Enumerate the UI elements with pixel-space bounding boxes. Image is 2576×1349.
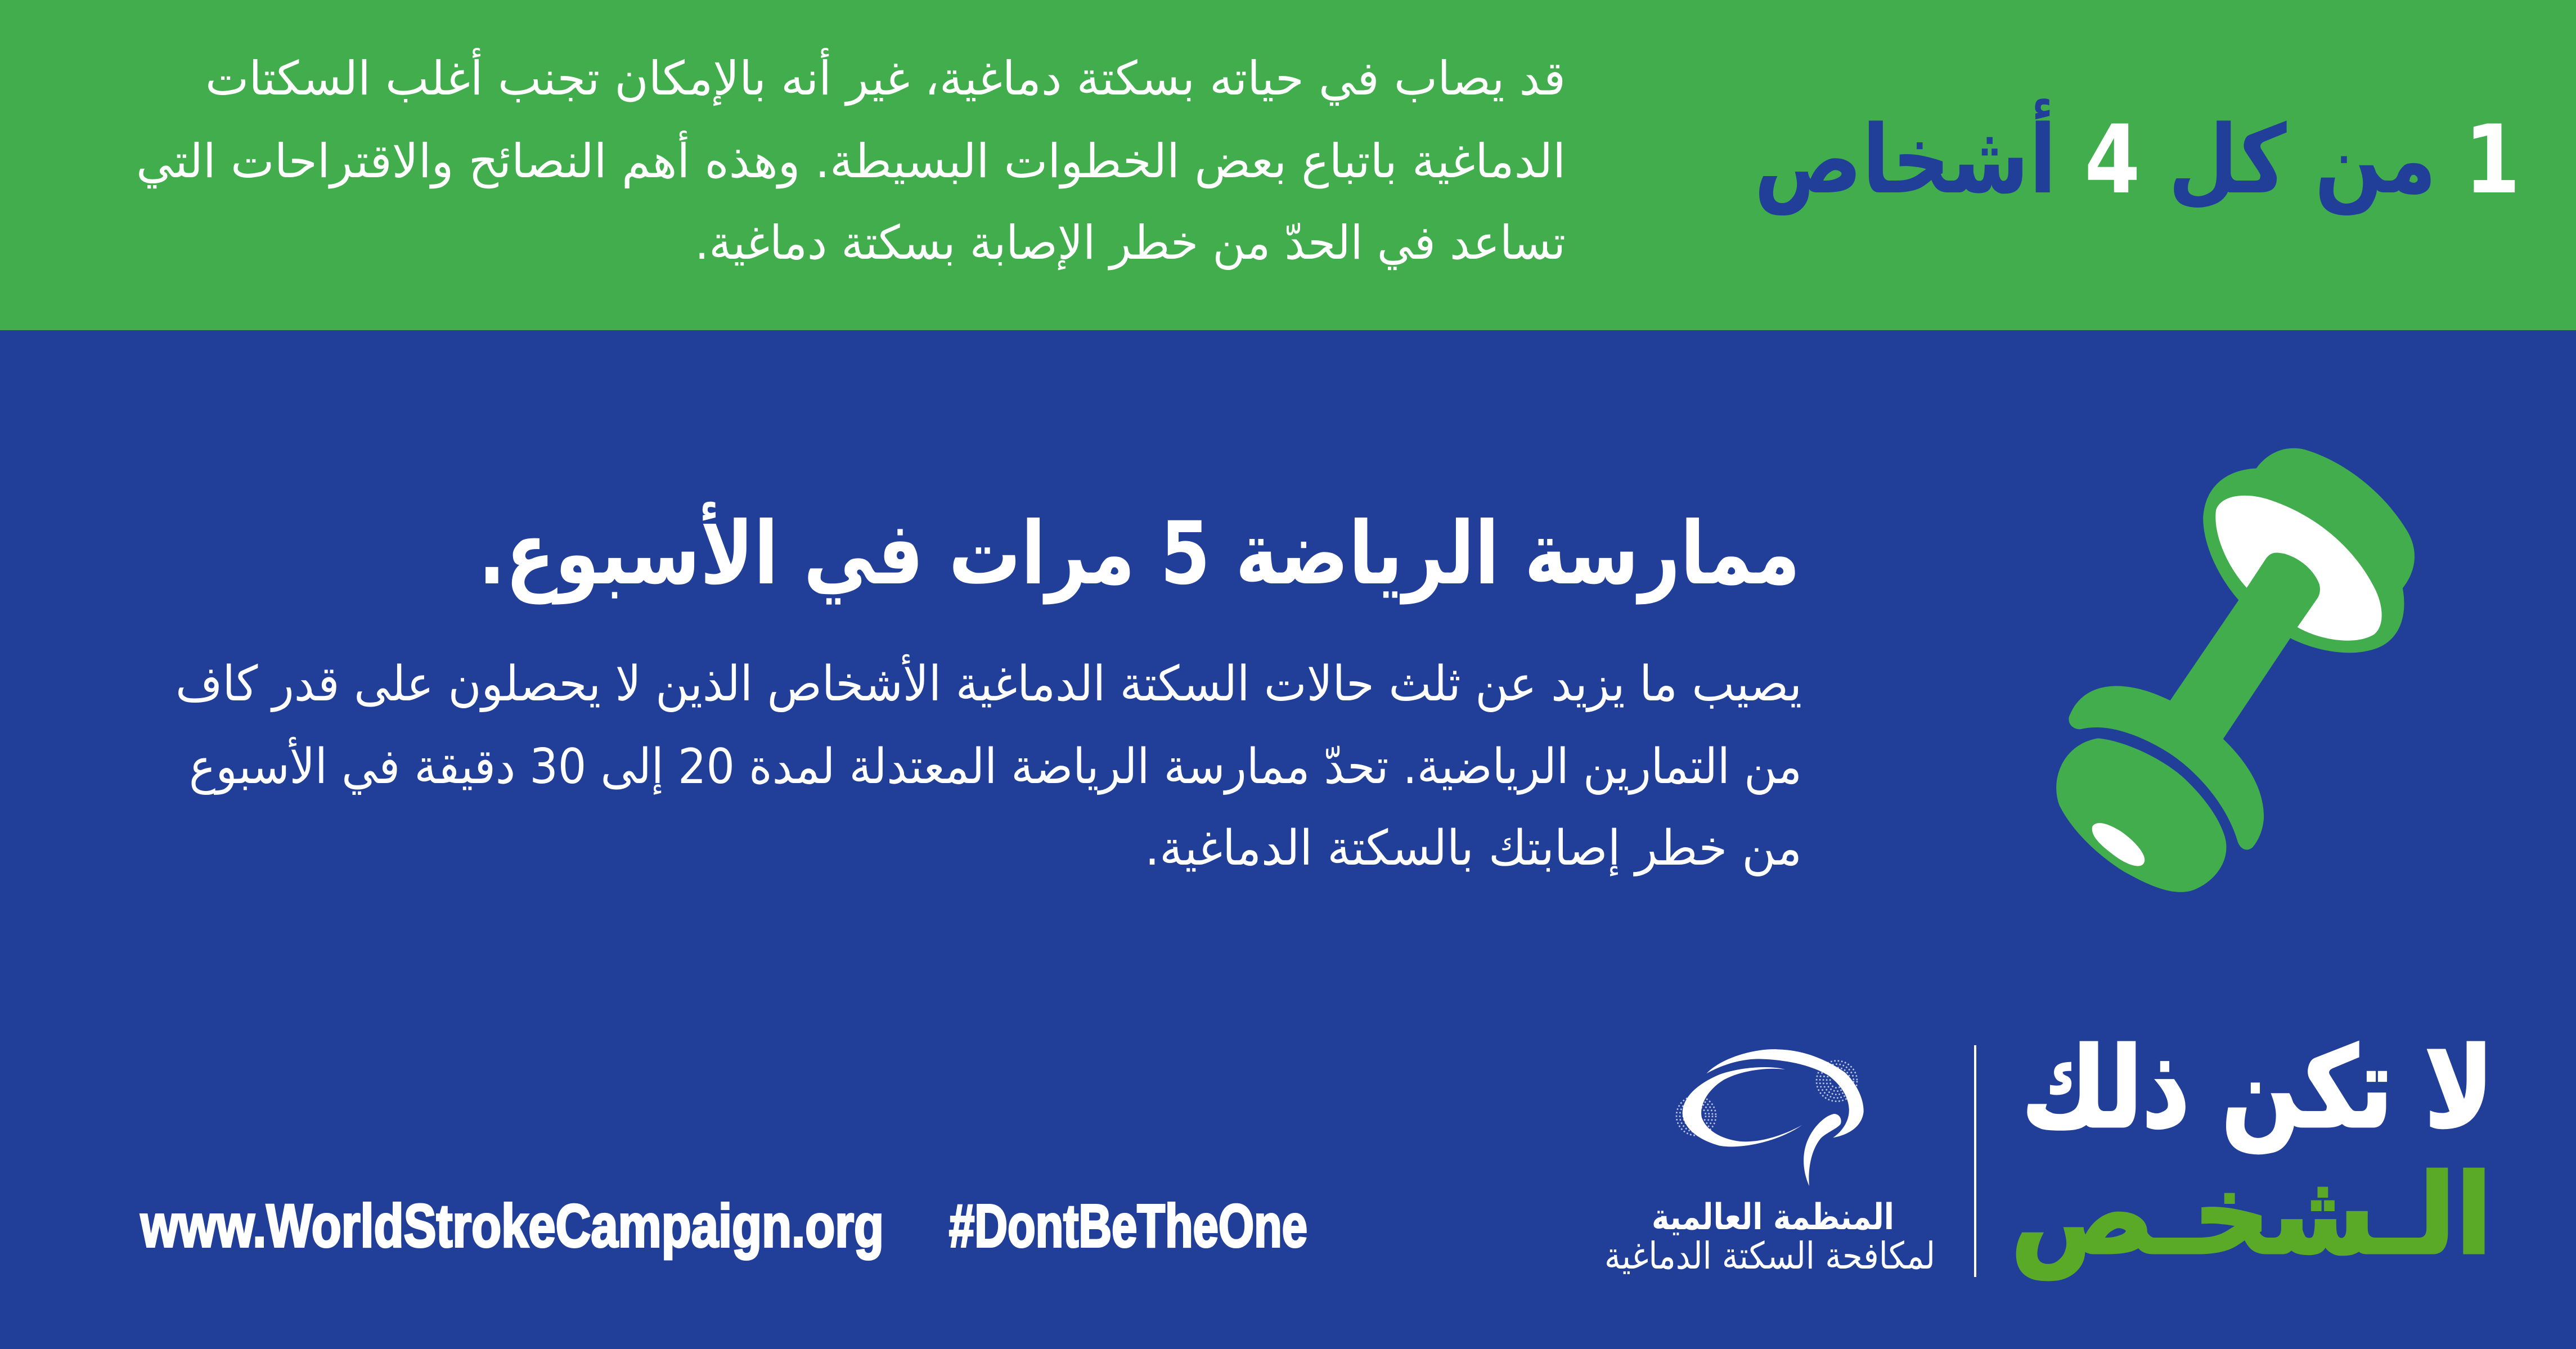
- panel: top green band: [0, 0, 2576, 330]
- panel: main blue background: [0, 329, 2576, 1349]
- text block: intro paragraph: تساعد في الحدّ من خطر الإصابة بسكتة دماغية.: [695, 215, 1566, 271]
- slogan: don't be that: لا تكن ذلك: [2022, 1024, 2493, 1153]
- text block: exercise paragraph: من خطر إصابتك بالسكتة الدماغية.: [1145, 820, 1802, 877]
- footer: hashtag: #DontBeTheOne: [949, 1191, 1307, 1260]
- text block: exercise paragraph: يصيب ما يزيد عن ثلث حالات السكتة الدماغية الأشخاص الذين لا يحصلون على قدر كاف: [176, 654, 1802, 712]
- text block: intro paragraph: قد يصاب في حياته بسكتة دماغية، غير أنه بالإمكان تجنب أغلب السكتات: [205, 48, 1566, 106]
- heading: exercise 5 times a week: ممارسة الرياضة 5 مرات في الأسبوع.: [478, 501, 1800, 605]
- logo: World Stroke Organization: [1604, 1049, 1935, 1278]
- text: organization name line 1: المنظمة العالمية: [1652, 1197, 1894, 1238]
- divider line: [1974, 1045, 1976, 1277]
- heading: 1 in 4 people: 1 من كل 4 أشخاص: [1754, 98, 2520, 215]
- text block: intro paragraph: [136, 48, 1566, 271]
- text block: exercise paragraph: [176, 654, 1802, 877]
- slogan: person: الـشخـص: [2011, 1151, 2492, 1280]
- text block: intro paragraph: الدماغية باتباع بعض الخطوات البسيطة. وهذه أهم النصائح والاقتراحات التي: [136, 131, 1566, 189]
- icon: brain swoosh emblem: [1676, 1049, 1864, 1186]
- text block: exercise paragraph: من التمارين الرياضية. تحدّ ممارسة الرياضة المعتدلة لمدة 20 إلى 30 دقيقة في الأسبوع: [189, 737, 1802, 795]
- icon: dumbbell: [2056, 448, 2415, 892]
- text: organization name line 2: لمكافحة السكتة الدماغية: [1604, 1234, 1935, 1278]
- footer: website URL: www.WorldStrokeCampaign.org: [140, 1191, 884, 1260]
